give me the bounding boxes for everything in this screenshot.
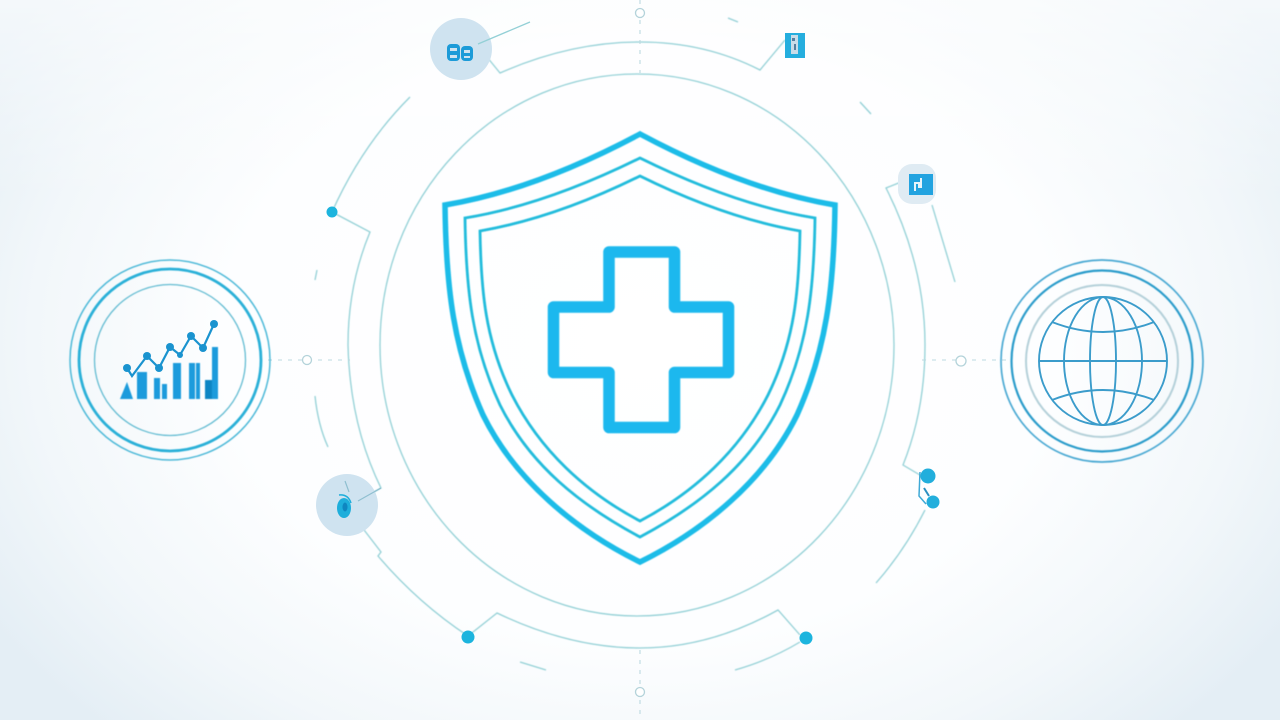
medical cross	[554, 252, 728, 428]
right outer arc	[886, 180, 925, 478]
right outer segment	[932, 205, 955, 282]
icon: document top right	[785, 33, 805, 58]
inner ring	[380, 74, 894, 616]
trend line	[123, 320, 218, 376]
icon: medical shield	[445, 134, 835, 562]
top dashed connector	[639, 0, 641, 73]
globe rings	[1001, 260, 1203, 462]
lower left short tick	[520, 662, 546, 670]
shield inner outline	[480, 176, 800, 521]
icon: capsule badge lower right	[919, 468, 940, 508]
top outer arc	[478, 40, 785, 73]
panel: globe medallion	[1001, 260, 1203, 462]
shield middle outline	[465, 158, 815, 537]
icon: globe	[1039, 297, 1167, 425]
connector nodes	[302, 8, 966, 696]
central ring network	[315, 18, 955, 670]
bottom outer arc	[468, 610, 800, 648]
icon: small chart badge right	[898, 164, 936, 204]
lower right short arc	[735, 642, 800, 670]
bottom dashed connector	[639, 650, 641, 720]
left ticks	[315, 270, 328, 447]
right dashed connector	[922, 359, 1008, 361]
dashed connectors	[268, 0, 1008, 720]
lower left outer segment	[361, 526, 468, 636]
left dashed connector	[268, 359, 350, 361]
bar chart	[120, 347, 218, 399]
icon: people badge	[430, 18, 530, 80]
lower right outer segment	[876, 510, 925, 583]
panel: chart medallion	[70, 260, 270, 460]
top right ticks	[728, 18, 871, 114]
left outer arc	[332, 212, 381, 501]
shield outer outline	[445, 134, 835, 562]
icon: drop badge lower left	[316, 474, 381, 536]
connector dots	[326, 206, 812, 644]
upper left outer segment	[332, 97, 410, 212]
chart rings	[70, 260, 270, 460]
